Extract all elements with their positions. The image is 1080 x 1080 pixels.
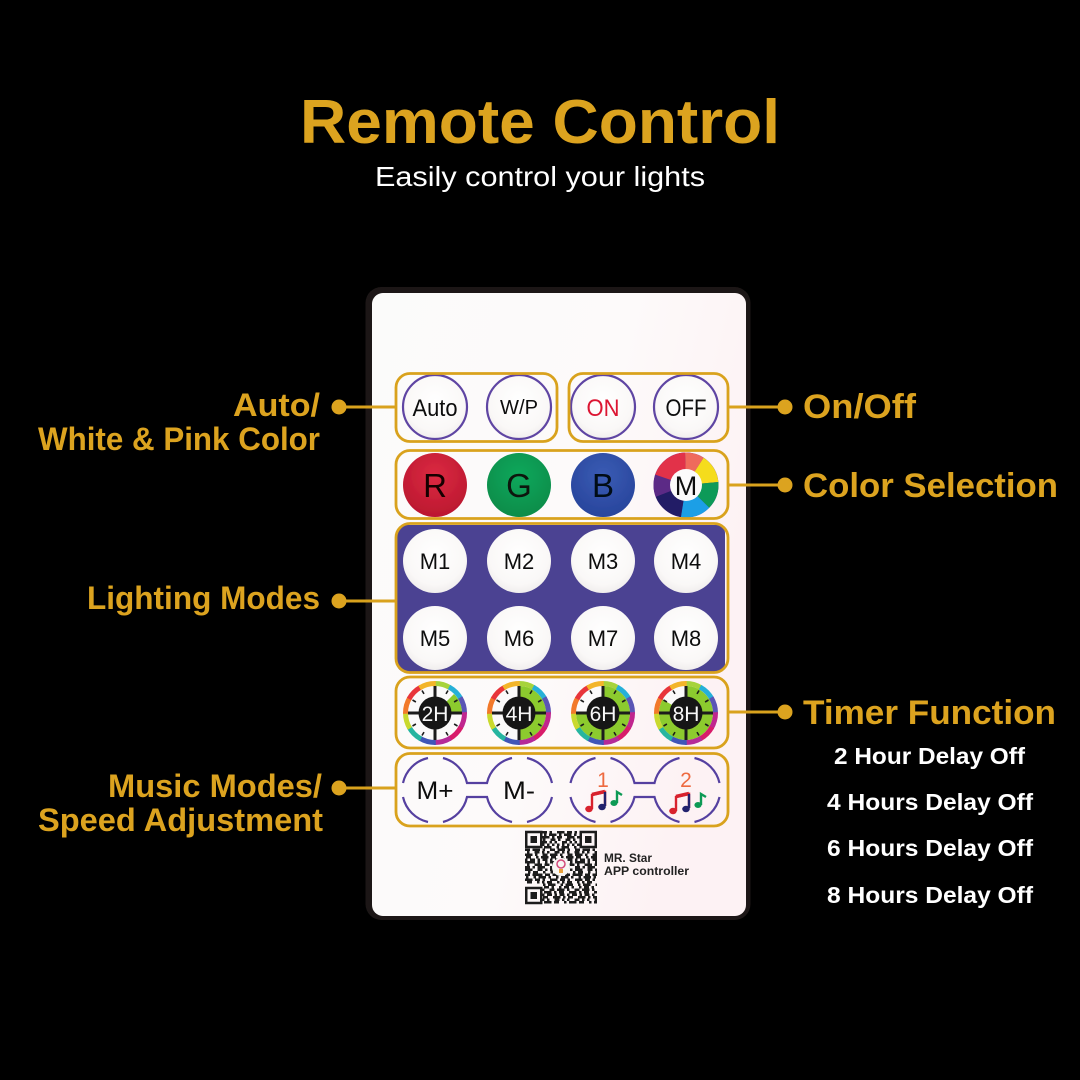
timer 8H (656, 684, 716, 742)
lighting mode buttons panel: M4 (671, 549, 701, 574)
callout: auto / white and pink color: White & Pink Color (38, 421, 320, 457)
lighting mode buttons panel: M5 (420, 626, 450, 651)
timer function details (827, 743, 1033, 908)
timer 6H (574, 684, 632, 742)
timer 8H: 8H (673, 703, 699, 726)
callout: auto / white and pink color: Auto/ (233, 387, 320, 423)
callout: on/off (728, 388, 917, 426)
lighting mode buttons panel: M8 (671, 626, 701, 651)
callout: music modes / speed adjustment: Speed Adjustment (38, 802, 323, 838)
timer 6H: 6H (590, 703, 616, 726)
music and speed buttons (403, 758, 720, 822)
buttons: auto and white/pink: Auto (412, 395, 458, 422)
buttons: on and off: OFF (666, 395, 706, 422)
title: Remote Control (300, 88, 780, 157)
lighting mode buttons panel: M3 (588, 549, 618, 574)
callout: music modes / speed adjustment: Music Modes/ (108, 768, 322, 804)
timer function details: 8 Hours Delay Off (827, 882, 1033, 908)
highlight boxes (396, 374, 728, 826)
callout: music modes / speed adjustment (38, 768, 396, 838)
multicolour wheel button: M (675, 471, 697, 501)
timer 4H: 4H (506, 703, 532, 726)
lighting mode buttons panel (397, 525, 725, 672)
buttons: auto and white/pink: W/P (500, 397, 538, 419)
timer function details: 6 Hours Delay Off (827, 835, 1033, 861)
buttons: on and off (571, 375, 718, 439)
app controller caption: APP controller (604, 866, 690, 878)
timer 2H: 2H (422, 703, 448, 726)
callout: auto / white and pink color (38, 387, 396, 457)
app controller caption: MR. Star (604, 853, 653, 865)
callout: color selection: Color Selection (803, 467, 1058, 505)
timer buttons (406, 684, 716, 742)
callout: on/off: On/Off (803, 388, 917, 426)
buttons: colour selection: B (592, 467, 614, 504)
multicolour wheel button (663, 462, 709, 508)
lighting mode buttons panel: M1 (420, 549, 450, 574)
subtitle: Easily control your lights (375, 161, 705, 192)
timer 2H (406, 684, 464, 742)
lighting mode buttons panel: M2 (504, 549, 534, 574)
timer function details: 2 Hour Delay Off (834, 743, 1025, 769)
remote body (366, 287, 750, 920)
music and speed buttons: M+ (416, 777, 454, 805)
buttons: colour selection (403, 453, 709, 517)
QR code (525, 832, 597, 903)
buttons: colour selection: G (506, 467, 532, 504)
music and speed buttons: 1 (597, 769, 609, 792)
lighting mode buttons panel: M6 (504, 626, 534, 651)
music and speed buttons: 2 (680, 769, 692, 792)
buttons: on and off: ON (586, 395, 620, 422)
music and speed buttons: M- (503, 777, 535, 805)
callout: timer function: Timer Function (803, 694, 1056, 732)
timer function details: 4 Hours Delay Off (827, 789, 1033, 815)
remote control (366, 287, 750, 920)
lighting mode buttons panel: M7 (588, 626, 618, 651)
buttons: colour selection: R (423, 467, 447, 504)
app controller caption (604, 853, 690, 878)
buttons: auto and white/pink (403, 375, 551, 439)
timer 4H (490, 684, 548, 742)
callout: lighting modes: Lighting Modes (87, 580, 320, 616)
